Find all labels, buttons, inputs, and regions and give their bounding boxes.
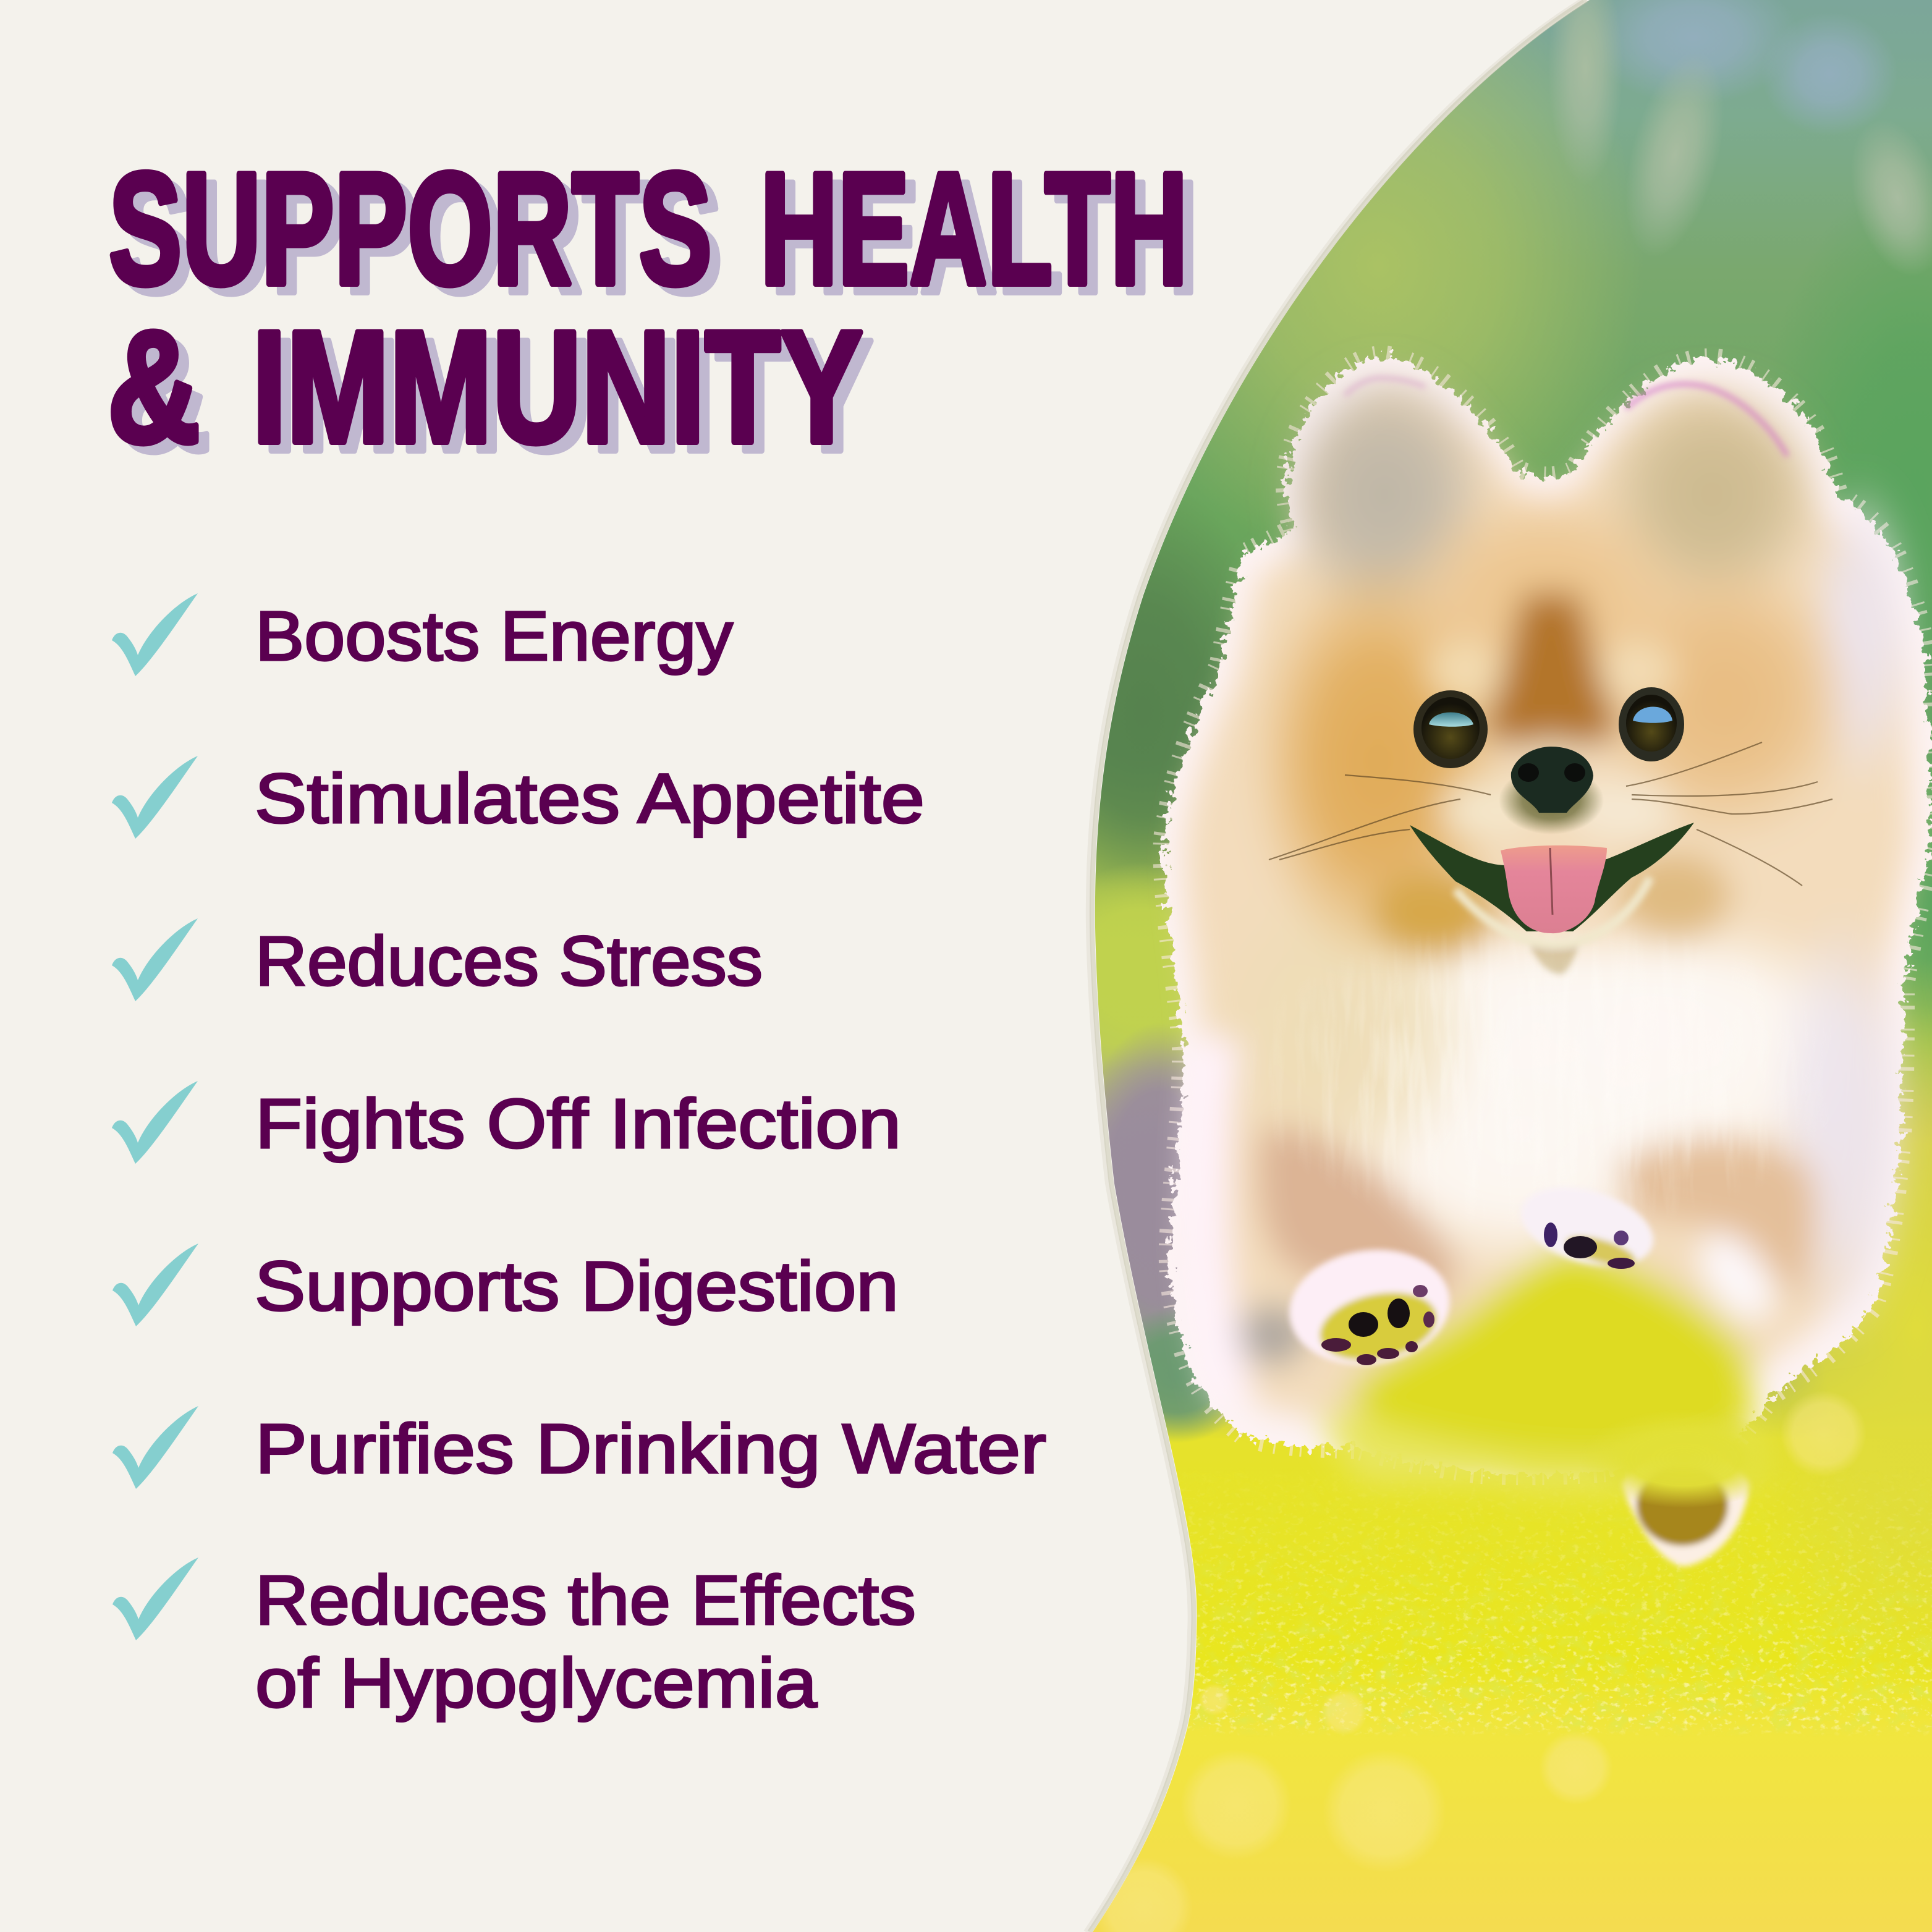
panel edge shadow xyxy=(1086,0,1587,1932)
heading text: HEALTH xyxy=(760,139,1188,318)
heading shadow: & xyxy=(118,306,211,485)
heading text xyxy=(108,139,1188,476)
heading text: & xyxy=(108,297,200,476)
leg shading xyxy=(1258,1128,1459,1304)
fur fringe xyxy=(1164,357,1932,1474)
bokeh highlights xyxy=(1094,1391,1866,1932)
heading xyxy=(108,139,1198,485)
benefit: Boosts Energy: Boosts Energy xyxy=(255,597,734,675)
chin xyxy=(1530,946,1579,974)
grass texture xyxy=(1100,1465,1932,1737)
benefit: Boosts Energy xyxy=(112,593,734,676)
left paw pads xyxy=(1321,1285,1434,1365)
paw fur xyxy=(1282,1240,1457,1375)
benefit: Fights Off Infection xyxy=(112,1081,901,1164)
dog silhouette xyxy=(1164,357,1932,1474)
benefit: Stimulates Appetite: Stimulates Appetite xyxy=(255,760,925,837)
tail xyxy=(1622,1455,1749,1567)
heading text: SUPPORTS xyxy=(109,139,712,318)
benefit: Reduces the Effects of Hypoglycemia xyxy=(112,1557,916,1722)
dog photo xyxy=(1164,357,1932,1567)
benefit: Reduces the Effects of Hypoglycemia: of Hypoglycemia xyxy=(255,1644,817,1722)
benefit: Supports Digestion: Supports Digestion xyxy=(255,1247,899,1325)
yellow belly xyxy=(1316,1384,1761,1483)
benefit: Reduces Stress: Reduces Stress xyxy=(255,922,763,1000)
whiskers xyxy=(1269,742,1832,886)
benefit: Stimulates Appetite xyxy=(112,756,925,839)
heading shadow: SUPPORTS xyxy=(119,148,722,326)
tongue xyxy=(1501,845,1607,933)
mouth xyxy=(1410,823,1694,933)
benefit: Reduces the Effects of Hypoglycemia: Reduces the Effects xyxy=(255,1561,916,1639)
ear pink rims xyxy=(1345,378,1787,456)
benefits list xyxy=(112,593,1046,1722)
right eye xyxy=(1619,687,1684,761)
benefit: Purifies Drinking Water: Purifies Drinking Water xyxy=(255,1410,1046,1488)
left edge glow xyxy=(1210,1038,1236,1397)
benefit: Fights Off Infection: Fights Off Infection xyxy=(255,1085,901,1163)
heading shadow: HEALTH xyxy=(771,148,1198,326)
fur streaks xyxy=(1236,915,1854,1236)
chest and side fur xyxy=(1279,921,1799,1106)
heading shadow xyxy=(118,148,1198,485)
tail blend into belly xyxy=(1579,1409,1789,1508)
soft fur colouring xyxy=(1185,358,1916,1483)
ear insides xyxy=(1273,358,1496,630)
photo background: garden with grass xyxy=(989,0,1932,1932)
right paw pads xyxy=(1544,1222,1635,1269)
head markings xyxy=(1248,550,1508,970)
sharp details xyxy=(1282,378,1787,1567)
left eye xyxy=(1413,690,1488,768)
heading text: IMMUNITY xyxy=(252,297,863,476)
nose xyxy=(1499,747,1604,834)
heading shadow: IMMUNITY xyxy=(263,306,873,485)
